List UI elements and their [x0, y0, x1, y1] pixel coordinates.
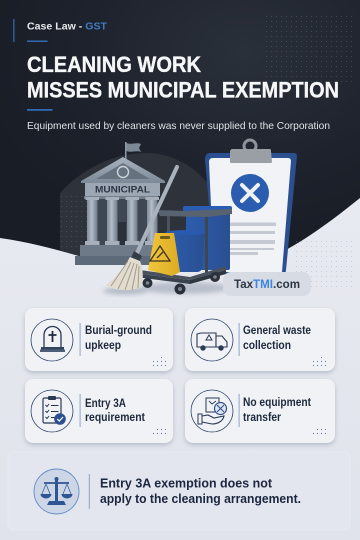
illustration: cleaning cart [140, 206, 232, 294]
panel: no equipment transfer [185, 379, 335, 443]
watermark badge [223, 272, 311, 296]
icon: gravestone [31, 319, 73, 361]
label line two: transfer [243, 412, 281, 424]
illustration: mop [103, 167, 177, 294]
subtitle: Equipment used by cleaners was never supplied to the Corporation [27, 120, 330, 132]
icon: waste truck [191, 319, 233, 361]
label line two: collection [243, 340, 291, 352]
illustration: wet floor sign [148, 233, 180, 276]
illustration: municipal building [75, 142, 165, 265]
label line two: requirement [85, 412, 145, 424]
panel: entry 3A requirement [25, 379, 173, 443]
dark header background [0, 0, 360, 290]
label line two: upkeep [85, 340, 121, 352]
icon: scales of justice [34, 469, 79, 514]
panel: general waste collection [185, 308, 335, 371]
illustration: clipboard [205, 140, 297, 274]
illustration: municipal building: MUNICIPAL [95, 184, 151, 194]
label: No equipment [243, 397, 311, 409]
category label [13, 19, 108, 42]
label: General waste [243, 325, 311, 337]
icon: checklist [31, 390, 73, 432]
title: CLEANING WORK [27, 52, 201, 77]
conclusion text line two: apply to the cleaning arrangement. [100, 492, 301, 506]
watermark badge: TaxTMI.com [234, 279, 300, 291]
label: Entry 3A [85, 398, 126, 410]
panel: conclusion [8, 452, 350, 530]
panel: burial-ground upkeep [25, 308, 173, 371]
icon: hand with crossed box [191, 390, 233, 432]
label: Burial-ground [85, 325, 152, 337]
title underline [27, 109, 52, 111]
category label: Case Law - GST [27, 20, 108, 32]
conclusion text: Entry 3A exemption does not [100, 476, 273, 490]
